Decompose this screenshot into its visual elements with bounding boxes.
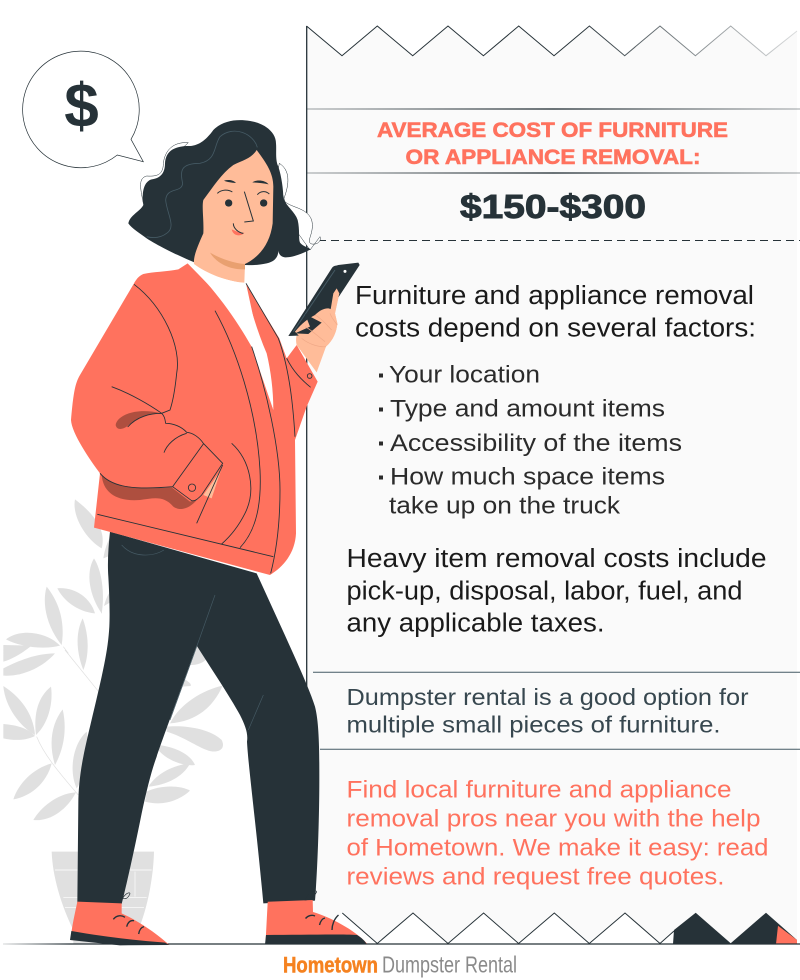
cost heading <box>377 118 728 169</box>
nose <box>244 192 253 222</box>
factors bullet list <box>379 362 682 519</box>
receipt paper fill <box>306 26 797 944</box>
sleeve shadows <box>102 411 197 509</box>
hair strands <box>147 131 257 238</box>
eyes and brows <box>224 180 269 207</box>
jacket buttons <box>188 374 312 491</box>
paper receipt panel <box>306 26 800 944</box>
Hometown Dumpster Rental logo: Hometown <box>283 952 378 978</box>
dumpster rental note <box>346 684 749 738</box>
heavy item costs text: any applicable taxes. <box>346 610 604 638</box>
hand <box>296 288 339 372</box>
second figure at bottom right <box>673 913 797 944</box>
neck shadow <box>210 253 245 269</box>
left shoe <box>70 893 169 945</box>
plant in pot (background) <box>3 499 223 944</box>
mouth <box>232 229 244 235</box>
factors intro text: costs depend on several factors: <box>355 315 756 343</box>
call to action text: of Hometown. We make it easy: read <box>346 835 768 862</box>
dumpster rental note: Dumpster rental is a good option for <box>346 684 749 710</box>
jacket <box>71 263 318 575</box>
factors intro text <box>355 282 756 343</box>
white hair curls <box>141 143 320 250</box>
eyelids <box>217 190 269 195</box>
face <box>194 150 273 283</box>
speech bubble with dollar sign: $ <box>64 72 99 141</box>
fingers <box>295 288 339 347</box>
hand in pocket <box>203 470 221 498</box>
call to action text: removal pros near you with the help <box>346 806 760 833</box>
cost range: $150-$300 <box>460 188 646 225</box>
factors bullet list: Your location <box>389 362 540 389</box>
call to action text: Find local furniture and appliance <box>346 777 732 804</box>
woman character <box>70 120 367 945</box>
receipt bottom zigzag edge <box>342 913 674 944</box>
phone <box>288 263 360 336</box>
jacket body <box>71 263 318 575</box>
factors bullet list: take up on the truck <box>389 492 621 519</box>
t-shirt <box>188 263 273 410</box>
ground line <box>3 943 800 945</box>
heavy item costs text: Heavy item removal costs include <box>346 545 766 573</box>
right shoe <box>265 891 367 944</box>
dumpster rental note: multiple small pieces of furniture. <box>346 712 720 738</box>
cost heading: OR APPLIANCE REMOVAL: <box>406 145 700 169</box>
call to action text <box>346 777 768 890</box>
call to action text: reviews and request free quotes. <box>346 863 724 890</box>
cost heading: AVERAGE COST OF FURNITURE <box>377 118 728 142</box>
factors bullet list: How much space items <box>390 463 665 490</box>
factors bullet list: Type and amount items <box>390 396 665 423</box>
heavy item costs text: pick-up, disposal, labor, fuel, and <box>346 577 742 605</box>
factors bullet list: Accessibility of the items <box>390 430 682 457</box>
Hometown Dumpster Rental logo: Dumpster Rental <box>382 952 517 978</box>
jacket seams <box>97 283 311 573</box>
trousers <box>77 532 319 904</box>
hair <box>128 120 311 265</box>
Hometown Dumpster Rental logo <box>283 952 517 978</box>
speech bubble with dollar sign <box>23 51 143 168</box>
heavy item costs text <box>346 545 766 638</box>
neck and hair back <box>128 120 320 283</box>
phone and hand <box>288 263 360 372</box>
factors intro text: Furniture and appliance removal <box>355 282 754 310</box>
